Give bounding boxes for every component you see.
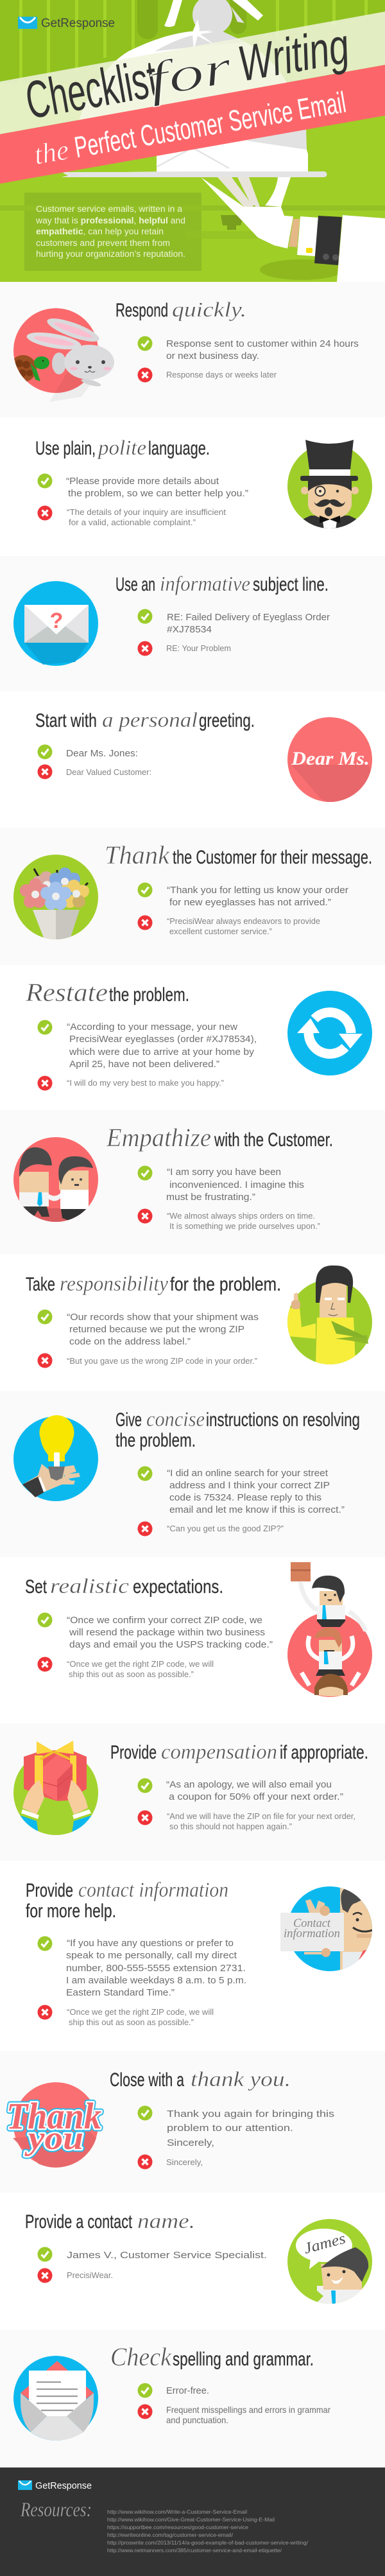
good example: Response sent to customer within 24 hours: [166, 338, 359, 349]
bad example: “Can you get us the good ZIP?”: [167, 1524, 284, 1533]
bad example: PrecisiWear.: [67, 2270, 113, 2280]
cream title band: [0, 12, 385, 134]
icon: cross: [137, 1811, 153, 1825]
icon: check: [137, 336, 153, 351]
good example: will resend the package within two business: [69, 1627, 265, 1638]
intro text: empathetic, can help you retain: [36, 227, 164, 236]
good example: [67, 1312, 259, 1347]
bad example: “Once we get the right ZIP code, we will: [67, 2007, 214, 2017]
icon: man in yellow shirt pointing up: [287, 1266, 372, 1364]
good example: [167, 612, 330, 635]
heading script: compensation: compensation: [161, 1741, 277, 1764]
resource links: https://supportbee.com/resources/good-customer-service: [107, 2524, 248, 2530]
bad example: Sincerely,: [166, 2157, 203, 2167]
section: polite language: [35, 437, 372, 531]
icon: check: [137, 882, 153, 898]
icon: man holding contact card: [280, 1886, 379, 1974]
heading line 2: for more help.: [26, 1901, 116, 1922]
good example: Sincerely,: [167, 2137, 214, 2148]
bad example: ship this out as soon as possible.”: [69, 2017, 194, 2027]
icon: gentleman with top hat: [287, 440, 372, 531]
bad example: “But you gave us the wrong ZIP code in your order.”: [67, 1356, 257, 1366]
icon: Thank you lettering: you: [24, 2120, 83, 2157]
section: spelling and grammar: [13, 2342, 330, 2441]
icon: check: [137, 2383, 153, 2398]
icon: Thank you lettering: Thank: [6, 2095, 101, 2137]
section: personal greeting: [36, 713, 372, 802]
resource links: http://www.netmanners.com/385/customer-service-and-email-etiquette/: [107, 2547, 282, 2554]
icon: check: [37, 745, 53, 759]
icon: Thank you lettering: Thank: [6, 2095, 101, 2137]
good example: [167, 885, 348, 908]
heading: Respond: [116, 300, 168, 321]
icon: two men consoling: [13, 1137, 98, 1224]
section: contact name: [25, 2210, 372, 2306]
icon: cross: [37, 506, 53, 520]
icon: cross: [137, 2404, 153, 2419]
heading: Provide a contact: [25, 2211, 132, 2232]
good example: April 25, have not been delivered.”: [69, 1059, 219, 1070]
icon: cross: [137, 1208, 153, 1224]
bad example: Dear Valued Customer:: [66, 767, 151, 777]
title: Checklist for Writing: [21, 16, 353, 130]
bad example: [167, 1211, 320, 1231]
icon: cross: [37, 764, 53, 779]
heading: Set: [25, 1576, 47, 1597]
heading: Take: [26, 1274, 55, 1295]
icon: cross: [137, 2155, 153, 2169]
heading: Use plain,: [35, 438, 96, 459]
good example: “As an apology, we will also email you: [166, 1779, 332, 1790]
good example: [166, 338, 359, 361]
icon: cross: [37, 1353, 53, 1368]
heading script: name: name.: [137, 2210, 195, 2233]
good example: speak to me personally, call my direct: [66, 1950, 237, 1961]
intro text: way that is professional, helpful and: [35, 216, 185, 225]
section: restate: [25, 978, 372, 1090]
bad example: so this should not happen again.”: [169, 1822, 292, 1831]
bad example: and punctuation.: [166, 2415, 228, 2425]
section: compensation: [11, 1741, 368, 1838]
good example: “I am sorry you have been: [167, 1167, 281, 1178]
subtitle: the Perfect Customer Service Email: [31, 85, 348, 171]
heading end: with the Customer.: [214, 1129, 333, 1151]
icon: check: [37, 1020, 53, 1035]
title: Checklist for Writing: for: [144, 40, 235, 107]
bad example: Response days or weeks later: [166, 370, 277, 379]
icon: cross: [137, 1522, 153, 1536]
bad example: [167, 1811, 355, 1831]
icon: check: [37, 2247, 53, 2261]
resource links: http://www.wikihow.com/Write-a-Customer-Service-Email: [107, 2509, 247, 2515]
intro text: customers and prevent them from: [36, 238, 170, 248]
icon: James speech bubble: James: [302, 2231, 347, 2258]
heading end: spelling and grammar.: [173, 2349, 314, 2370]
section: contact information: [26, 1879, 379, 2027]
good example: email and let me know if this is correct.”: [169, 1504, 345, 1515]
good example: Thank you again for bringing this: [167, 2109, 334, 2119]
section: realistic expectations: [25, 1562, 372, 1697]
good example: “Once we confirm your correct ZIP code, we: [67, 1615, 262, 1626]
logo: GetResponse: GetResponse: [41, 17, 115, 30]
title: Checklist for Writing: Checklist: [21, 49, 162, 130]
heading end: greeting.: [199, 710, 255, 731]
bad example: “I will do my very best to make you happy.”: [67, 1078, 224, 1088]
good example: days and email you the USPS tracking code.”: [69, 1639, 273, 1650]
icon: cross: [37, 1657, 53, 1672]
heading: Start with: [35, 710, 97, 731]
good example: for new eyeglasses has not arrived.”: [169, 897, 331, 908]
good example: [66, 1938, 246, 1998]
bad example: [166, 2405, 330, 2425]
bad example: [67, 2007, 214, 2027]
heading script: concise: concise: [146, 1408, 205, 1431]
good example: “Our records show that your shipment was: [67, 1312, 259, 1323]
icon: envelope with question mark: ?: [50, 609, 63, 633]
heading end: the problem.: [109, 984, 189, 1005]
icon: cross: [37, 2005, 53, 2020]
heading script: Restate: Restate: [25, 978, 108, 1007]
heading script: thank you: thank you.: [191, 2068, 291, 2091]
icon: James speech bubble: [287, 2219, 372, 2306]
good example: address and I think your correct ZIP: [169, 1480, 330, 1491]
icon: check: [137, 2106, 153, 2120]
icon: hand with light bulb: [13, 1415, 98, 1501]
bad example: [167, 916, 320, 936]
heading end: for the problem.: [170, 1274, 281, 1295]
good example: [67, 1615, 273, 1650]
good example: #XJ78534: [167, 624, 212, 635]
heading: Provide: [26, 1880, 73, 1901]
bad example: It is something we pride ourselves upon.”: [169, 1221, 320, 1231]
resource links: http://ewriteonline.com/tag/customer-service-email/: [107, 2532, 234, 2538]
icon: check: [37, 474, 53, 488]
icon: cross: [37, 1076, 53, 1090]
good example: “Please provide more details about: [66, 476, 219, 487]
bad example: [67, 1659, 214, 1679]
bad example: “PrecisiWear always endeavors to provide: [167, 916, 320, 926]
bad example: Frequent misspellings and errors in grammar: [166, 2405, 330, 2415]
heading script: Empathize: Empathize: [106, 1123, 211, 1152]
section: informative subject: [13, 573, 330, 666]
section: thank you: [6, 2068, 334, 2169]
heading: Provide: [110, 1742, 157, 1763]
icon: Thank you lettering: Thank: [6, 2095, 101, 2137]
good example: [66, 476, 248, 499]
bad example: “And we will have the ZIP on file for your next order,: [167, 1811, 355, 1821]
good example: I am available weekdays 8 a.m. to 5 p.m.: [66, 1975, 246, 1986]
heading: Use an: [116, 574, 155, 595]
bad example: [67, 507, 226, 527]
section: empathize: [13, 1123, 333, 1231]
icon: check: [37, 1613, 53, 1627]
good example: returned because we put the wrong ZIP: [69, 1324, 244, 1335]
good example: Error-free.: [166, 2385, 209, 2396]
icon: rabbit and turtle: [10, 308, 114, 402]
icon: Thank you lettering: [6, 2082, 101, 2168]
good example: problem to our attention.: [167, 2123, 293, 2134]
good example: RE: Failed Delivery of Eyeglass Order: [167, 612, 330, 623]
icon: cross: [137, 916, 153, 930]
bad example: “The details of your inquiry are insufficient: [67, 507, 226, 517]
bad example: for a valid, actionable complaint.”: [69, 518, 196, 527]
heading end: expectations.: [133, 1576, 223, 1597]
section: thank the customer: [13, 840, 372, 939]
icon: hands holding gift box: [11, 1741, 101, 1838]
icon: Thank you lettering: you: [24, 2120, 83, 2157]
icon: cross: [137, 367, 153, 383]
good example: Dear Ms. Jones:: [66, 748, 138, 759]
icon: Dear Ms. badge: Dear Ms.: [291, 748, 370, 769]
header panel: [0, 0, 385, 282]
icon: stacked men holding a box: [287, 1562, 372, 1697]
good example: “According to your message, your new: [67, 1022, 237, 1032]
heading script: quickly: quickly.: [172, 299, 246, 322]
icon: check: [137, 1466, 153, 1481]
good example: the problem, so we can better help you.”: [68, 488, 248, 499]
icon: cross: [137, 641, 153, 656]
footer logo: GetResponse: [35, 2480, 92, 2491]
bad example: ship this out as soon as possible.”: [69, 1669, 194, 1679]
subtitle: the Perfect Customer Service Email: the: [31, 134, 71, 171]
good example: PrecisiWear eyeglasses (order #XJ78534),: [69, 1034, 257, 1045]
heading script: Thank: Thank: [105, 840, 170, 869]
icon: flower bouquet: [13, 855, 98, 939]
good example: James V., Customer Service Specialist.: [67, 2250, 267, 2261]
good example: [167, 1468, 345, 1515]
heading end: language.: [148, 438, 210, 459]
icon: open envelope with letter: [13, 2356, 98, 2441]
bad example: excellent customer service.”: [169, 927, 272, 936]
good example: [166, 1167, 304, 1203]
resource links: http://proswrite.com/2013/11/14/a-good-example-of-bad-customer-service-writing/: [107, 2539, 309, 2546]
intro text: hurting your organization’s reputation.: [36, 249, 185, 259]
heading: Give: [116, 1409, 142, 1431]
icon: check: [37, 1310, 53, 1324]
icon: Dear Ms. badge: [287, 717, 372, 802]
section: responsibility: [26, 1266, 372, 1368]
good example: must be frustrating.”: [166, 1192, 255, 1203]
bad example: RE: Your Problem: [166, 643, 231, 653]
good example: a coupon for 50% off your next order.”: [169, 1791, 343, 1802]
icon: man holding contact card: Contact: [293, 1917, 331, 1930]
icon: man holding contact card: information: [284, 1927, 340, 1940]
red title band: [0, 65, 385, 184]
good example: [67, 1022, 257, 1070]
heading end: subject line.: [253, 574, 329, 595]
intro text: Customer service emails, written in a: [36, 204, 182, 214]
heading script: a personal: a personal: [102, 709, 198, 732]
good example: “Thank you for letting us know your order: [167, 885, 348, 896]
resources heading: Resources:: [20, 2498, 92, 2521]
good example: “I did an online search for your street: [167, 1468, 329, 1479]
resource links: [107, 2509, 309, 2554]
good example: which were due to arrive at your home by: [69, 1047, 255, 1057]
heading script: Check: Check: [110, 2342, 172, 2371]
heading script: responsibility: responsibility: [60, 1273, 168, 1296]
icon: check: [137, 609, 153, 624]
heading script: polite: polite: [97, 437, 146, 460]
icon: envelope with question mark: [13, 581, 98, 666]
icon: cross: [37, 2268, 53, 2283]
icon: refresh arrows: [287, 991, 372, 1075]
good example: “If you have any questions or prefer to: [67, 1938, 234, 1949]
section: respond quickly: [10, 299, 359, 402]
bad example: “We almost always ships orders on time.: [167, 1211, 315, 1221]
heading: Close with a: [110, 2069, 184, 2091]
footer panel: [0, 2467, 385, 2576]
good example: number, 800-555-5555 extension 2731.: [66, 1963, 246, 1974]
good example: inconvenienced. I imagine this: [169, 1179, 304, 1190]
heading script: contact information: contact information: [78, 1879, 228, 1902]
good example: or next business day.: [166, 351, 259, 361]
icon: check: [137, 1779, 153, 1793]
section: concise instructions: [13, 1408, 360, 1536]
intro text: [35, 204, 185, 259]
good example: code is 75324. Please reply to this: [169, 1492, 321, 1503]
good example: [167, 2109, 334, 2148]
good example: code on the address label.”: [69, 1336, 191, 1347]
good example: Eastern Standard Time.”: [66, 1987, 175, 1998]
resource links: http://www.wikihow.com/Give-Great-Customer-Service-Using-E-Mail: [107, 2516, 275, 2523]
good example: [166, 1779, 343, 1802]
icon: check: [137, 1166, 153, 1180]
icon: Thank you lettering: you: [24, 2120, 83, 2157]
heading script: informative: informative: [160, 573, 250, 596]
icon: check: [37, 1936, 53, 1951]
heading script: realistic: realistic: [50, 1575, 129, 1598]
bad example: “Once we get the right ZIP code, we will: [67, 1659, 214, 1669]
heading line 2: the problem.: [116, 1430, 196, 1451]
